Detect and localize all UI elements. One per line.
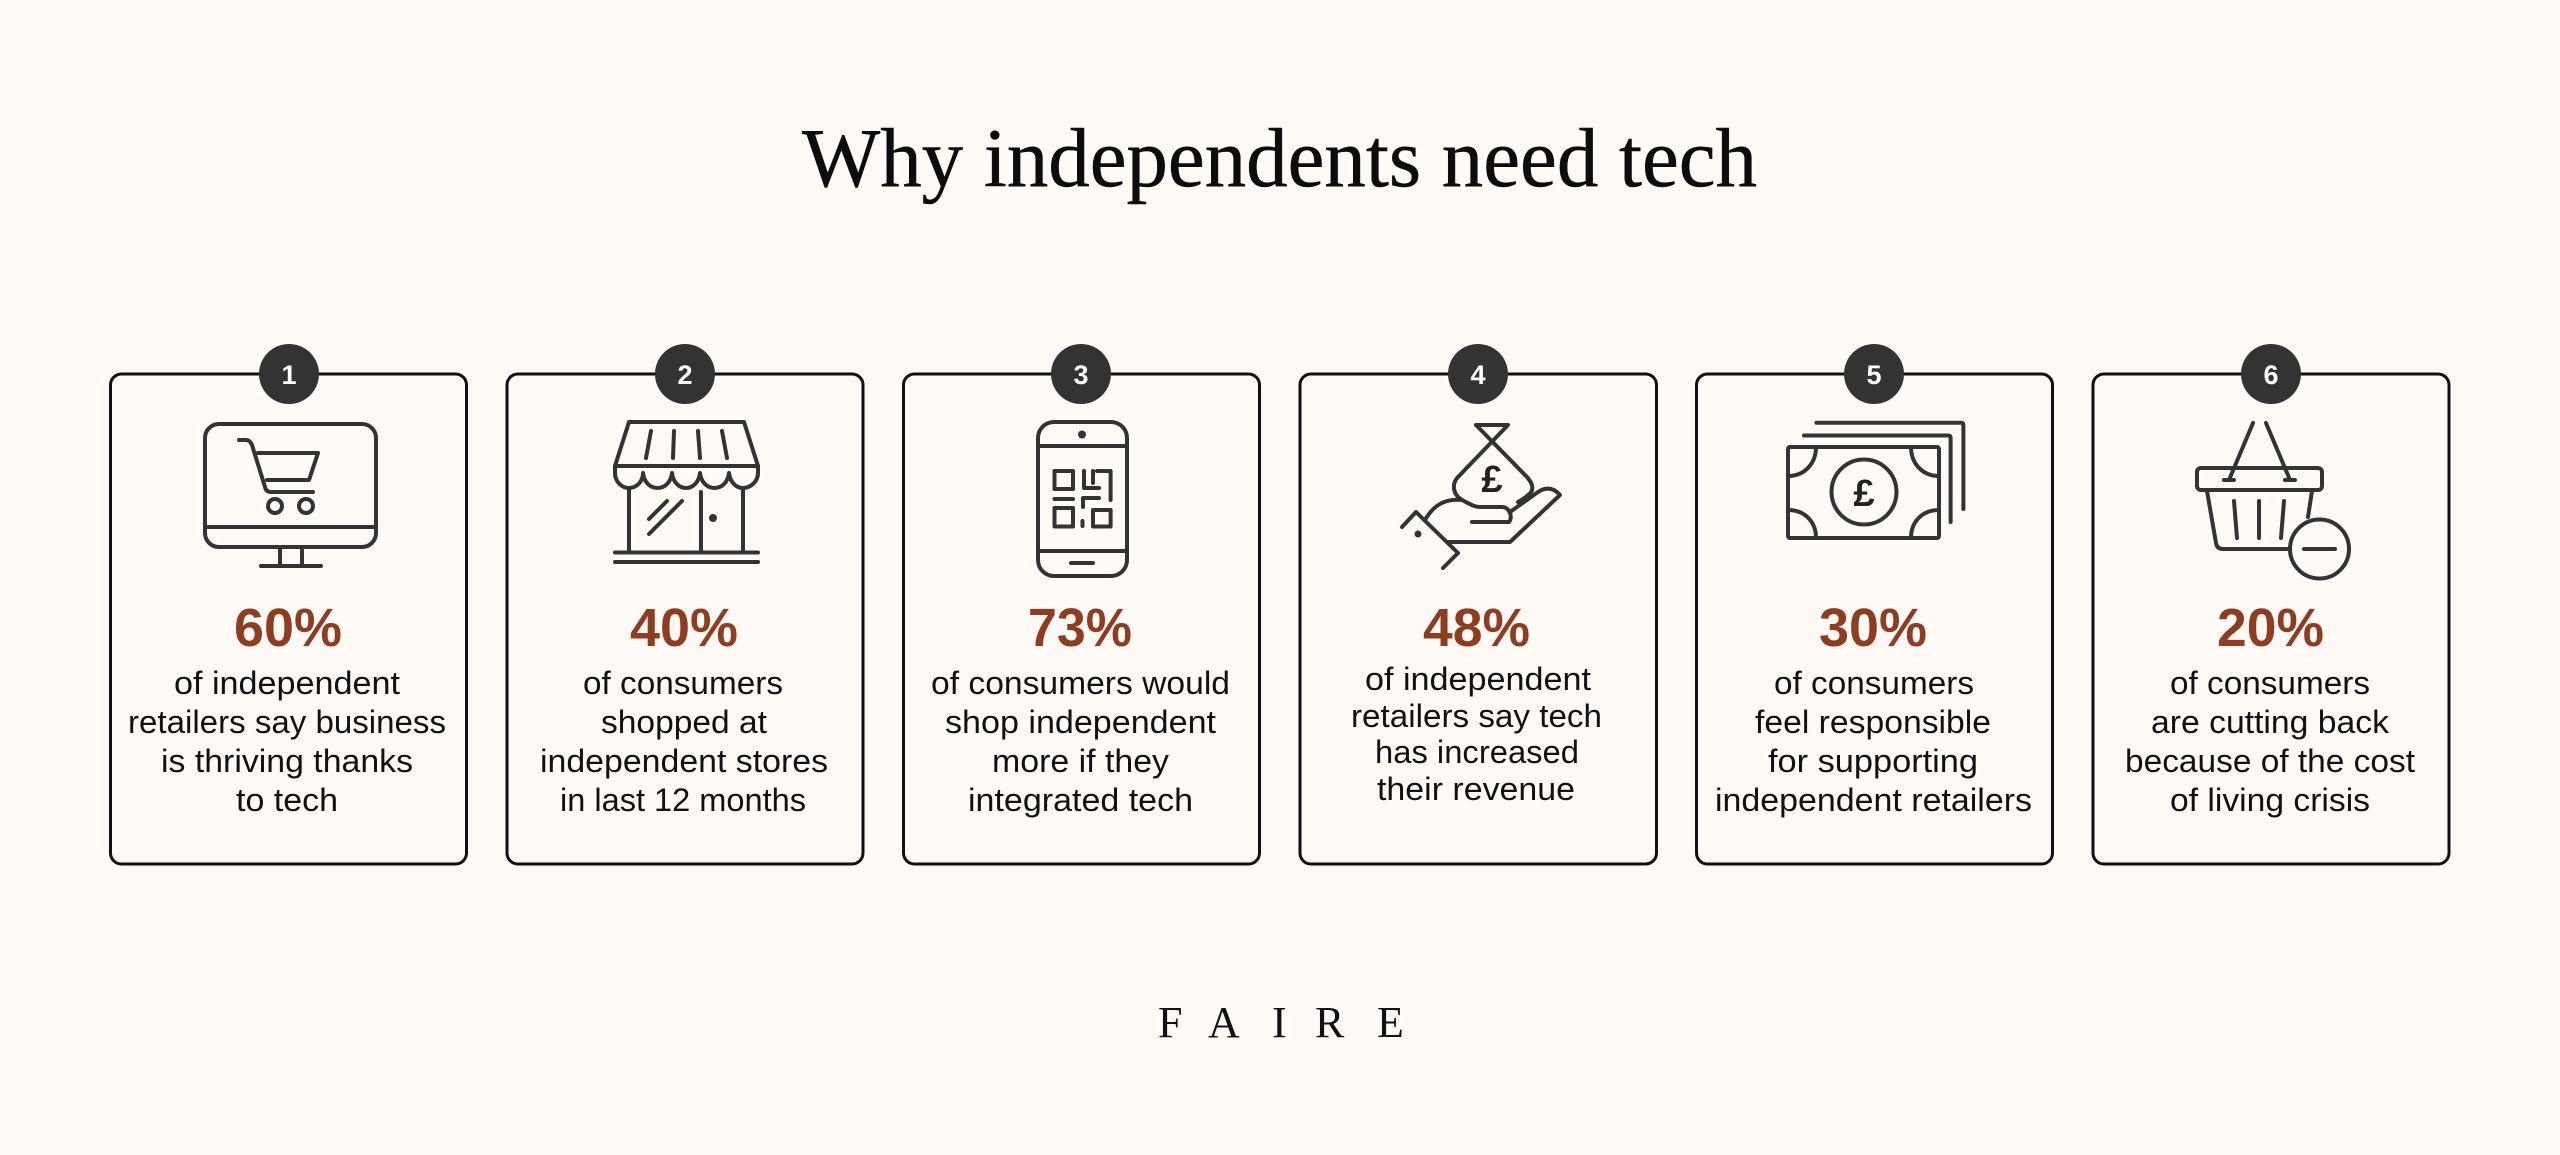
description 6: of consumers	[2170, 665, 2370, 701]
description 4: of independent	[1365, 661, 1591, 697]
description 1: to tech	[236, 782, 338, 818]
card 1 frame	[110, 374, 466, 864]
number badge 1: 1	[281, 360, 297, 390]
stat 20%: 20%	[2217, 598, 2324, 658]
description 4: their revenue	[1377, 771, 1575, 807]
card 5 frame	[1696, 374, 2052, 864]
panel: card 1	[110, 344, 466, 864]
icon: monitor with shopping cart	[205, 424, 376, 566]
icon: stack of banknotes	[1788, 423, 1963, 538]
panel: card 6	[2093, 344, 2449, 864]
description 5: independent retailers	[1715, 782, 2032, 818]
description 5: of consumers	[1774, 665, 1974, 701]
stat 40%: 40%	[630, 598, 738, 658]
panel: card 2	[507, 344, 863, 864]
description 5: feel responsible	[1755, 704, 1991, 740]
icon: hand holding money bag	[1402, 425, 1560, 568]
description 3: of consumers would	[931, 665, 1230, 701]
stat 48%: 48%	[1423, 598, 1530, 658]
number badge 3: 3	[1073, 360, 1089, 390]
stat 30%: 30%	[1819, 598, 1927, 658]
description 1: retailers say business	[128, 704, 446, 740]
number badge 5: 5	[1866, 360, 1882, 390]
icon: shopping basket with minus	[2197, 423, 2349, 578]
number badge 1	[259, 344, 319, 404]
panel: card 3	[904, 344, 1260, 864]
number badge 5	[1844, 344, 1904, 404]
panel: card 4	[1300, 344, 1656, 864]
logo: FAIRE: FAIRE	[1158, 998, 1404, 1047]
panel: card 5	[1696, 344, 2052, 864]
card 4 frame	[1300, 374, 1656, 864]
card 2 frame	[507, 374, 863, 864]
number badge 4	[1448, 344, 1508, 404]
description 2: of consumers	[583, 665, 783, 701]
description 2: shopped at	[601, 704, 767, 740]
number badge 3	[1051, 344, 1111, 404]
description 6: because of the cost	[2125, 743, 2415, 779]
icon: stack of banknotes: £	[1853, 473, 1875, 515]
number badge 4: 4	[1470, 360, 1486, 390]
description 4: has increased	[1375, 734, 1579, 770]
description 4	[1351, 661, 1602, 807]
card 3 frame	[904, 374, 1260, 864]
description 2: independent stores	[540, 743, 828, 779]
description 1	[128, 665, 446, 818]
description 1: is thriving thanks	[161, 743, 413, 779]
description 3	[931, 665, 1230, 818]
description 5: for supporting	[1768, 743, 1978, 779]
number badge 6: 6	[2263, 360, 2279, 390]
number badge 2	[655, 344, 715, 404]
stat 73%: 73%	[1028, 598, 1132, 658]
description 3: shop independent	[945, 704, 1216, 740]
description 6: of living crisis	[2170, 782, 2370, 818]
number badge 2: 2	[677, 360, 693, 390]
description 6	[2125, 665, 2415, 818]
card 6 frame	[2093, 374, 2449, 864]
title: Why independents need tech	[802, 112, 1757, 205]
description 6: are cutting back	[2151, 704, 2390, 740]
description 2	[540, 665, 828, 818]
icon: phone with QR code	[1038, 422, 1127, 576]
icon: storefront	[615, 422, 758, 562]
number badge 6	[2241, 344, 2301, 404]
stat 60%: 60%	[234, 598, 342, 658]
description 2: in last 12 months	[560, 782, 806, 818]
description 4: retailers say tech	[1351, 698, 1602, 734]
description 3: more if they	[992, 743, 1169, 779]
description 5	[1715, 665, 2032, 818]
description 1: of independent	[174, 665, 400, 701]
description 3: integrated tech	[968, 782, 1193, 818]
icon: hand holding money bag: £	[1481, 459, 1503, 501]
